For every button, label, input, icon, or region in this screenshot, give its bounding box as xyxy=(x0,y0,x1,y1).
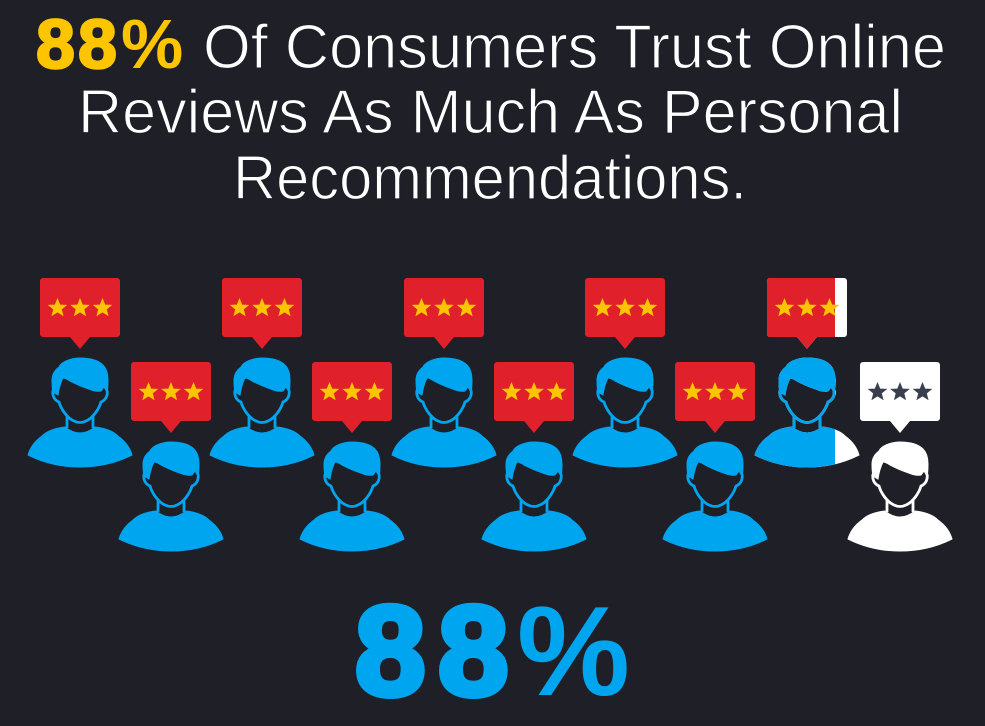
title line 3: Recommendations. xyxy=(233,144,747,213)
title highlight: 88%: 8 xyxy=(36,5,75,83)
reviewer 1 xyxy=(28,278,132,467)
reviewer 8 xyxy=(663,362,767,551)
reviewer 4 xyxy=(300,362,404,551)
reviewer 10 (white) xyxy=(848,362,952,551)
large 88%: 8 xyxy=(355,580,426,722)
title highlight: 88%: 8 xyxy=(78,5,117,83)
title xyxy=(36,5,946,213)
reviewer 3 xyxy=(210,278,314,467)
large 88%: 8 xyxy=(438,580,509,722)
reviewer 2 xyxy=(119,362,223,551)
reviewer 6 xyxy=(482,362,586,551)
reviewer 9 (partly filled) xyxy=(755,278,859,467)
title line 1: Of Consumers Trust Online xyxy=(203,13,946,82)
reviewer 7 xyxy=(573,278,677,467)
reviewer 5 xyxy=(392,278,496,467)
title highlight: 88%: % xyxy=(121,5,183,83)
pictogram: 10 reviewers, 88% highlighted xyxy=(28,278,952,551)
large 88%: % xyxy=(517,580,630,722)
title line 2: Reviews As Much As Personal xyxy=(78,78,903,147)
